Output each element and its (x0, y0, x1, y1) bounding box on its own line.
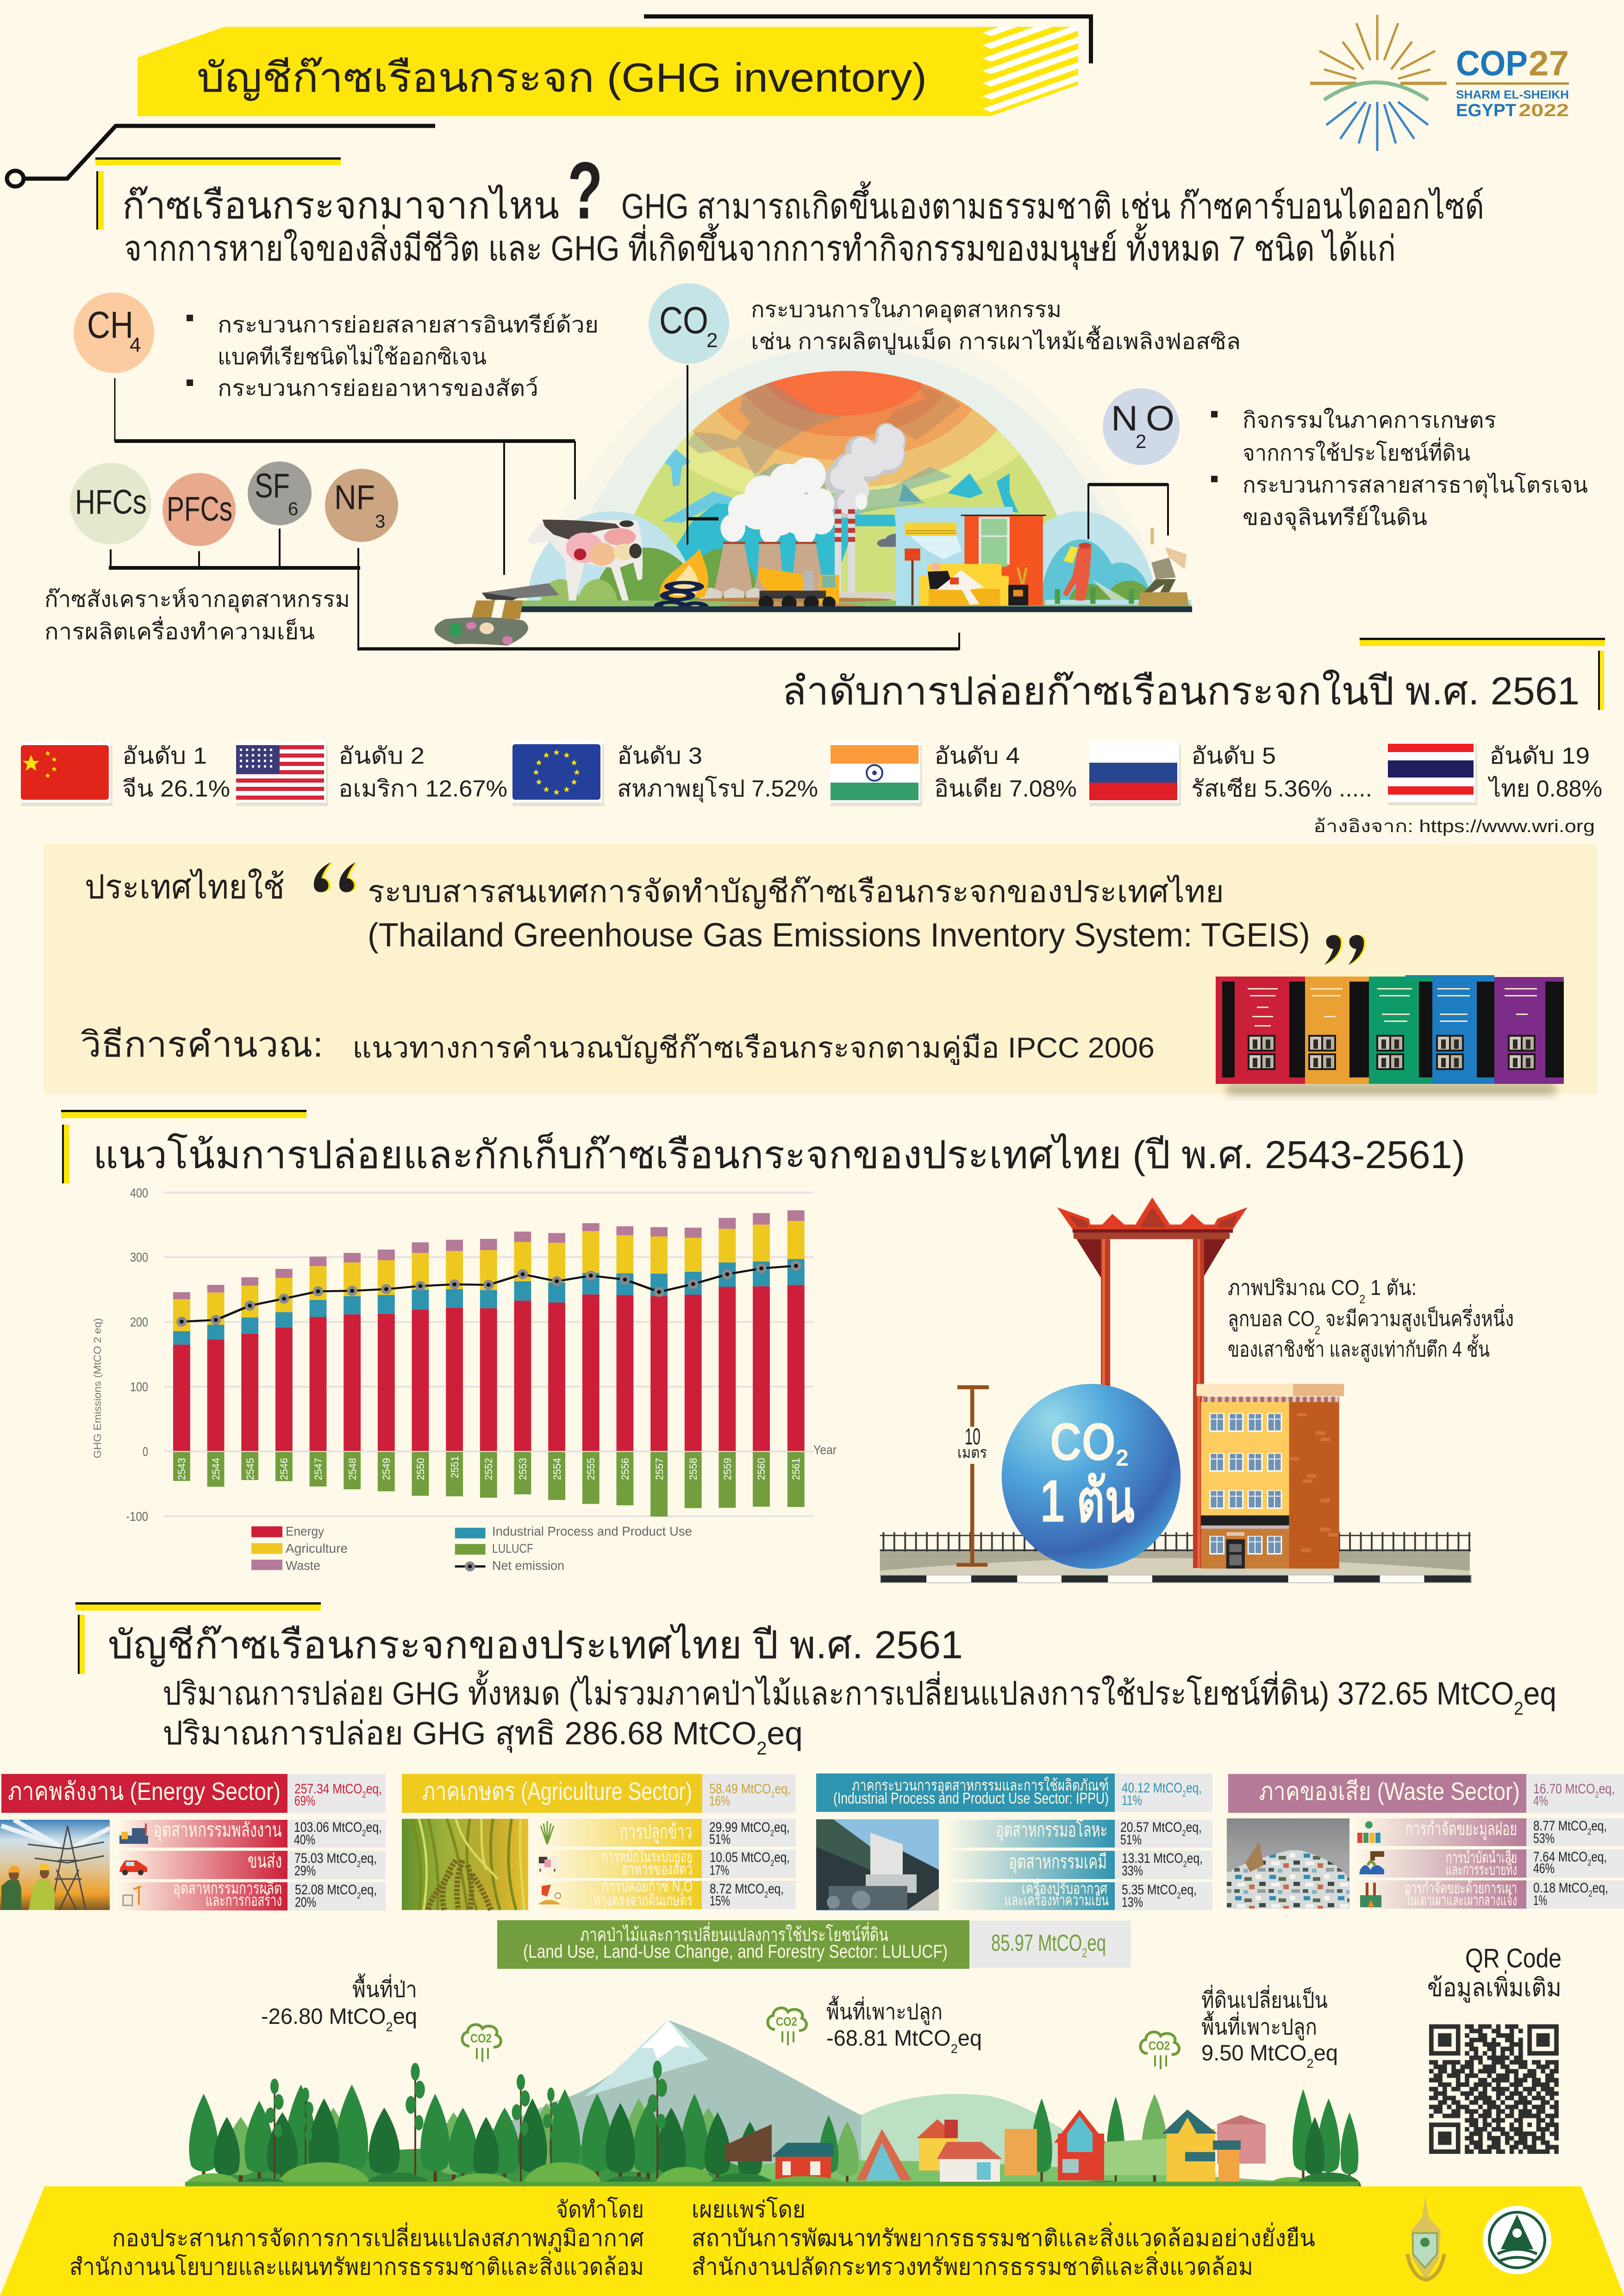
panel: waste sector: ในเตาเผาและเผากลางแจ้ง (1405, 1891, 1517, 1909)
heading: emission trend (61, 1110, 1465, 1183)
gas: N2O: 2 (1136, 430, 1146, 452)
chart: emissions by sector: 2550 (415, 1458, 426, 1480)
heading: Thailand GHG inventory 2018: 2 (756, 1738, 767, 1759)
icon: construction crane (123, 1886, 141, 1905)
gases: HFCs, PFCs, SF6, NF3: HFCs (75, 483, 147, 521)
COP27 logo: 2022 (1518, 101, 1569, 120)
panel: waste sector: การกำจัดขยะมูลฝอย (1405, 1819, 1517, 1840)
panel: energy sector: eq, (366, 1781, 382, 1797)
rank 2 USA: อเมริกา 12.67% (338, 776, 507, 802)
panel: agriculture sector: 2 (764, 1890, 768, 1899)
panel: industrial process sector: 33% (1122, 1863, 1143, 1879)
QR code block: QR Code (1465, 1943, 1562, 1973)
chart: emissions by sector: 2543 (176, 1458, 187, 1480)
panel: agriculture sector: 58.49 MtCO (709, 1781, 784, 1797)
gas: CH4: 4 (130, 334, 141, 356)
panel: industrial process sector: 13.31 MtCO (1122, 1851, 1197, 1866)
chart: emissions by sector: 2560 (756, 1458, 767, 1480)
chart: emissions by sector: 200 (130, 1315, 148, 1329)
panel: agriculture sector: อาหารของสัตว์ (622, 1860, 693, 1878)
illustration: one tonne of CO2: 1 ตัน (1040, 1467, 1135, 1535)
panel: waste sector: 2 (1587, 1858, 1591, 1867)
heading: Thailand GHG inventory 2018: ปริมาณการปล่อย GHG ทั้งหมด (ไม่รวมภาคป่าไม้และการเปลี่ยนแปลงการใช้ประโยชน์ที่ดิน) 372.65 MtCO (162, 1675, 1624, 1711)
panel: LULUCF sector (497, 1920, 1131, 1969)
panel: energy sector: 257.34 MtCO (294, 1781, 377, 1797)
illustration: one tonne of CO2: 1 ตัน: (1365, 1276, 1417, 1300)
chart: emissions by sector: 2557 (654, 1458, 665, 1480)
gas: CO2: เช่น การผลิตปูนเม็ด การเผาไหม้เชื้อเพลิงฟอสซิล (751, 325, 1241, 355)
LULUCF labels with CO2 icons: 2 (951, 2041, 958, 2056)
gas: CH4 (74, 292, 599, 401)
illustration: one tonne of CO2: 10 (965, 1424, 981, 1450)
footer: จัดทำโดย (556, 2196, 644, 2222)
panel: energy sector: อุตสาหกรรมพลังงาน (153, 1819, 282, 1842)
QR code block: ข้อมูลเพิ่มเติม (1427, 1970, 1562, 2003)
chart: emissions by sector: GHG Emissions (MtCO 2 eq) (92, 1318, 103, 1458)
landscape: forest, mountain and village (185, 2020, 1361, 2210)
gas: CH4: กระบวนการย่อยสลายสารอินทรีย์ด้วย (218, 313, 599, 337)
panel: agriculture sector: eq, (774, 1850, 790, 1865)
LULUCF labels with CO2 icons: 2 (386, 2020, 393, 2034)
panel: industrial process sector: 2 (1182, 1789, 1186, 1798)
LULUCF labels with CO2 icons: 9.50 MtCO (1201, 2041, 1309, 2066)
gases: HFCs, PFCs, SF6, NF3: การผลิตเครื่องทำความเย็น (44, 616, 315, 644)
panel: industrial process sector: เครื่องปรับอากาศ (1022, 1878, 1107, 1898)
chart: emissions by sector: 2554 (551, 1458, 563, 1480)
icon: incinerator (1360, 1883, 1381, 1907)
COP27 logo: EGYPT (1456, 101, 1516, 120)
footer: สำนักงานปลัดกระทรวงทรัพยากรธรรมชาติและสิ่งแวดล้อม (692, 2251, 1253, 2280)
IPCC books (1216, 975, 1564, 1095)
rank 4 India (831, 741, 1077, 806)
gases: HFCs, PFCs, SF6, NF3: NF (334, 478, 375, 516)
rank 5 Russia: อันดับ 5 (1191, 743, 1276, 769)
footer (0, 2186, 1624, 2296)
LULUCF labels with CO2 icons: พื้นที่เพาะปลูก (826, 1996, 943, 2025)
rank 3 EU: สหภาพยุโรป 7.52% (617, 776, 818, 803)
panel: agriculture sector: 51% (709, 1832, 731, 1847)
LULUCF labels with CO2 icons: -68.81 MtCO (826, 2026, 954, 2051)
heading: emission trend: แนวโน้มการปล่อยและกักเก็บก๊าซเรือนกระจกของประเทศไทย (ปี พ.ศ. 2543-2561) (93, 1132, 1465, 1176)
gases: HFCs, PFCs, SF6, NF3: 6 (288, 499, 298, 519)
chart: emissions by sector: 2546 (278, 1458, 290, 1480)
panel: waste sector: eq, (1591, 1849, 1607, 1865)
panel: energy sector: 103.06 MtCO (294, 1820, 376, 1835)
panel: energy sector: 69% (294, 1793, 315, 1809)
panel: agriculture sector: eq, (768, 1881, 784, 1897)
LULUCF labels with CO2 icons (261, 1973, 1338, 2071)
illustration: one tonne of CO2: ภาพปริมาณ CO (1228, 1276, 1376, 1300)
photo: rice field (402, 1819, 528, 1910)
panel: industrial process sector: 11% (1122, 1793, 1142, 1808)
panel: agriculture sector: eq, (775, 1781, 791, 1797)
chart: emissions by sector: 2553 (517, 1458, 529, 1480)
panel: industrial process sector: 2 (1177, 1891, 1181, 1900)
panel: LULUCF sector: eq (1087, 1930, 1106, 1956)
chart: emissions by sector: 2545 (244, 1458, 256, 1480)
panel: industrial process sector: 2 (1182, 1829, 1186, 1838)
illustration: one tonne of CO2: CO (1050, 1412, 1116, 1472)
rank 5 Russia: รัสเซีย 5.36% ..... (1191, 776, 1372, 802)
gas: N2O: จากการใช้ประโยชน์ที่ดิน (1243, 437, 1470, 466)
gases: HFCs, PFCs, SF6, NF3: ก๊าซสังเคราะห์จากอุตสาหกรรม (44, 587, 350, 613)
chart: emissions by sector: 400 (130, 1186, 148, 1200)
panel: agriculture sector: 2 (770, 1859, 774, 1868)
gas: N2O (1103, 388, 1588, 531)
LULUCF labels with CO2 icons: ที่ดินเปลี่ยนเป็น (1201, 1985, 1328, 2013)
QR code block (1427, 1943, 1562, 2152)
heading: Thailand GHG inventory 2018: บัญชีก๊าซเรือนกระจกของประเทศไทย ปี พ.ศ. 2561 (108, 1623, 963, 1668)
panel: LULUCF sector: (Land Use, Land-Use Change, and Forestry Sector: LULUCF) (523, 1941, 948, 1962)
close quote (1324, 935, 1366, 965)
panel: waste sector: 4% (1533, 1793, 1548, 1809)
heading: Thailand GHG inventory 2018: ปริมาณการปล่อย GHG สุทธิ 286.68 MtCO (162, 1715, 759, 1751)
panel: agriculture sector: 15% (710, 1893, 730, 1909)
illustration: one tonne of CO2: ลูกบอล CO (1228, 1307, 1331, 1331)
panel: agriculture sector: 2 (770, 1829, 774, 1838)
panel: industrial process sector: (Industrial Process and Product Use Sector: IPPU) (833, 1790, 1109, 1807)
gas: CO2: CO (659, 299, 708, 342)
panel: agriculture sector: ทางตรงจากดินเกษตร (593, 1892, 693, 1909)
icon: soil and hand (538, 1885, 561, 1904)
panel: TGEIS and calculation method: แนวทางการคำนวณบัญชีก๊าซเรือนกระจกตามคู่มือ IPCC 2006 (352, 1032, 1155, 1065)
panel: agriculture sector: 16% (709, 1793, 730, 1809)
footer: สถาบันการพัฒนาทรัพยากรธรรมชาติและสิ่งแวดล้อมอย่างยั่งยืน (692, 2222, 1315, 2251)
smoke plumes (824, 423, 906, 518)
tyres (658, 583, 704, 610)
chart: emissions by sector: 2551 (449, 1456, 461, 1478)
chart: emissions by sector: 2547 (312, 1458, 324, 1480)
gas: CH4: CH (87, 304, 133, 346)
icon: power plant (119, 1823, 148, 1844)
chart: emissions by sector (92, 1186, 837, 1573)
country ranking (21, 740, 1602, 806)
panel: LULUCF sector: 2 (1082, 1946, 1087, 1960)
panel: waste sector: eq, (1593, 1880, 1608, 1896)
living room (896, 507, 1046, 605)
panel: industrial process sector: 2 (1183, 1860, 1187, 1869)
panel: TGEIS and calculation method: วิธีการคำนวณ: (81, 1025, 323, 1064)
panel: energy sector: 75.03 MtCO (294, 1851, 369, 1866)
gas: CO2: 2 (706, 329, 718, 352)
cooling towers and stacks (713, 543, 824, 596)
LULUCF labels with CO2 icons: พื้นที่ป่า (352, 1973, 417, 2002)
gases: HFCs, PFCs, SF6, NF3 (44, 461, 398, 644)
icon: CO2 cloud: CO2 (1149, 2039, 1170, 2053)
panel: industrial process sector: eq, (1186, 1820, 1202, 1835)
title banner: บัญชีก๊าซเรือนกระจก (GHG inventory) (197, 55, 927, 101)
panel: waste sector: 7.64 MtCO (1533, 1849, 1600, 1865)
footer: สำนักงานนโยบายและแผนทรัพยากรธรรมชาติและสิ่งแวดล้อม (69, 2251, 644, 2280)
chart: emissions by sector: 2559 (722, 1458, 733, 1480)
panel: industrial process sector: eq, (1181, 1882, 1197, 1898)
icon: rice plant (541, 1821, 554, 1844)
icon: CO2 cloud (462, 2025, 501, 2062)
heading: emissions ranking (782, 638, 1605, 713)
title banner (137, 14, 1093, 116)
heading: where greenhouse gases come from (7, 126, 1484, 270)
panel: energy sector: eq, (366, 1820, 382, 1835)
panel: LULUCF sector: 85.97 MtCO (991, 1930, 1116, 1956)
panel: energy sector: eq, (361, 1851, 377, 1866)
open quote (314, 862, 358, 892)
cow (527, 520, 643, 601)
panel: industrial process sector: 13% (1122, 1895, 1143, 1910)
LULUCF labels with CO2 icons: 2 (1306, 2056, 1314, 2071)
rank 4 India: อินเดีย 7.08% (934, 776, 1077, 802)
panel: waste sector: การกำจัดขยะด้วยการเผา (1405, 1879, 1517, 1897)
panel: agriculture sector (402, 1774, 796, 1910)
heading: where greenhouse gases come from: ? (568, 146, 603, 236)
panel: energy sector: อุตสาหกรรมการผลิต (173, 1879, 282, 1898)
panel: TGEIS and calculation method: ระบบสารสนเทศการจัดทำบัญชีก๊าซเรือนกระจกของประเทศไทย (368, 874, 1224, 909)
panel: industrial process sector: 5.35 MtCO (1122, 1882, 1189, 1898)
rank 19 Thailand (1388, 740, 1602, 805)
chart: emissions by sector: Year (813, 1443, 837, 1457)
panel: industrial process sector: 40.12 MtCO (1122, 1780, 1197, 1796)
illustration: dome with sources of emissions (435, 234, 1192, 700)
chart: emissions by sector: 2556 (619, 1458, 631, 1480)
gas: CO2: กระบวนการในภาคอุตสาหกรรม (751, 297, 1062, 323)
panel: energy sector: 2 (362, 1829, 366, 1838)
gas: N2O: กระบวนการสลายสารธาตุไนโตรเจน (1243, 472, 1588, 498)
photo: factory (816, 1819, 939, 1910)
panel: energy sector (0, 1774, 386, 1910)
sprayer (1057, 543, 1131, 604)
panel: energy sector: ภาคพลังงาน (Energy Sector) (8, 1778, 281, 1805)
rank 5 Russia (1089, 741, 1372, 806)
panel: industrial process sector (816, 1773, 1212, 1910)
COP27 logo (1310, 15, 1569, 151)
footer: กองประสานการจัดการการเปลี่ยนแปลงสภาพภูมิอากาศ (112, 2222, 644, 2252)
panel: TGEIS and calculation method: (Thailand Greenhouse Gas Emissions Inventory System: TGEIS) (368, 917, 1310, 954)
illustration: one tonne of CO2: เมตร (957, 1444, 987, 1462)
panel: waste sector: 2 (1595, 1790, 1599, 1799)
heading: where greenhouse gases come from: จากการหายใจของสิ่งมีชีวิต และ GHG ที่เกิดขึ้นจากการทำกิจกรรมของมนุษย์ ทั้งหมด 7 ชนิด ได้แก่ (124, 223, 1396, 270)
illustration: one tonne of CO2: จะมีความสูงเป็นครึ่งหนึ่ง (1320, 1304, 1514, 1332)
panel: energy sector: 2 (357, 1891, 361, 1900)
flame (659, 548, 708, 599)
panel: waste sector: 0.18 MtCO (1533, 1880, 1600, 1896)
panel: energy sector: eq, (361, 1882, 377, 1898)
heading: emissions ranking: ลำดับการปล่อยก๊าซเรือนกระจกในปี พ.ศ. 2561 (782, 669, 1580, 713)
gas: N2O: กิจกรรมในภาคการเกษตร (1243, 407, 1496, 433)
illustration: one tonne of CO2 (880, 1197, 1514, 1583)
chart: emissions by sector: 2561 (790, 1458, 802, 1480)
panel: agriculture sector: 8.72 MtCO (710, 1881, 777, 1897)
photo: rubbish pile (1227, 1818, 1349, 1909)
panel: industrial process sector: อุตสาหกรรมเคมี (1009, 1851, 1107, 1874)
panel: energy sector: และการก่อสร้าง (206, 1891, 282, 1910)
rank 1 China: จีน 26.1% (122, 776, 230, 802)
panel: agriculture sector: O (684, 1878, 693, 1895)
panel: waste sector: 46% (1533, 1861, 1555, 1876)
heading: Thailand GHG inventory 2018 (75, 1602, 1556, 1759)
panel: industrial process sector: อุตสาหกรรมอโลหะ (996, 1818, 1107, 1842)
panel: LULUCF sector: ภาคป่าไม้และการเปลี่ยนแปลงการใช้ประโยชน์ที่ดิน (580, 1922, 888, 1945)
panel: agriculture sector: การปล่อยก๊าซ N (602, 1878, 712, 1895)
icon: CO2 cloud (1140, 2032, 1179, 2069)
panel: waste sector: 2 (1587, 1827, 1591, 1836)
panel: agriculture sector: การหมักในระบบย่อย (602, 1848, 693, 1866)
logo: round seal (1483, 2206, 1551, 2274)
panel: waste sector (1227, 1774, 1624, 1909)
illustration: one tonne of CO2: 2 (1359, 1292, 1365, 1306)
icon: cow (538, 1857, 557, 1872)
panel: agriculture sector: การปลูกข้าว (620, 1821, 692, 1843)
chart: emissions by sector: 300 (130, 1250, 148, 1264)
COP27 logo: COP (1456, 44, 1528, 83)
gas: N2O: O (1146, 399, 1174, 438)
chart: emissions by sector: 100 (130, 1380, 148, 1394)
footer: เผยแพร่โดย (692, 2196, 806, 2222)
connector lines (109, 365, 1168, 650)
panel: industrial process sector: 20.57 MtCO (1120, 1820, 1195, 1835)
chart: emissions by sector: 2544 (210, 1458, 222, 1480)
chart: emissions by sector: Agriculture (286, 1541, 348, 1556)
icon: recycling bins (1357, 1821, 1380, 1843)
rank 3 EU (512, 740, 818, 806)
heading: where greenhouse gases come from: ก๊าซเรือนกระจกมาจากไหน (122, 185, 559, 227)
photo: power pylon and workers (0, 1820, 110, 1910)
icon: CO2 cloud: CO2 (470, 2031, 492, 2045)
rank 4 India: อันดับ 4 (934, 743, 1020, 769)
LULUCF labels with CO2 icons: eq (1314, 2041, 1338, 2066)
panel: agriculture sector: 10.05 MtCO (710, 1850, 785, 1865)
panel: waste sector: 53% (1533, 1831, 1555, 1846)
gas: N2O: N (1111, 399, 1138, 438)
gas: CO2 (649, 283, 1241, 364)
panel: industrial process sector: ภาคกระบวนการอุตสาหกรรมและการใช้ผลิตภัณฑ์ (852, 1776, 1109, 1795)
panel: waste sector: และการระบายทิ้ง (1446, 1858, 1517, 1879)
LULUCF labels with CO2 icons: -26.80 MtCO (261, 2004, 388, 2029)
icon: CO2 cloud (768, 2008, 806, 2045)
source note: อ้างอิงจาก: https://www.wri.org (1313, 817, 1595, 836)
illustration: one tonne of CO2: 2 (1116, 1445, 1129, 1471)
rank 2 USA (236, 741, 507, 806)
chart: emissions by sector: 2558 (687, 1458, 699, 1480)
panel: energy sector: 52.08 MtCO (295, 1882, 370, 1898)
panel: agriculture sector: 2 (680, 1887, 684, 1898)
panel: agriculture sector: 29.99 MtCO (709, 1820, 784, 1835)
panel: waste sector: 1% (1533, 1893, 1547, 1908)
panel: agriculture sector: ภาคเกษตร (Agriculture Sector) (422, 1778, 692, 1805)
rank 1 China (21, 741, 230, 806)
panel: energy sector: 2 (357, 1860, 361, 1869)
panel: agriculture sector: eq, (774, 1820, 790, 1835)
panel: waste sector: การบำบัดน้ำเสีย (1446, 1846, 1517, 1867)
mixer truck (693, 567, 892, 612)
gas: N2O: ของจุลินทรีย์ในดิน (1243, 504, 1427, 531)
heading: Thailand GHG inventory 2018: eq (1524, 1675, 1556, 1711)
chart: emissions by sector: 2549 (381, 1458, 392, 1480)
panel: waste sector: 8.77 MtCO (1533, 1818, 1600, 1834)
panel: energy sector: 2 (362, 1790, 366, 1799)
chart: emissions by sector: Energy (286, 1524, 324, 1538)
icon: car (119, 1860, 147, 1875)
chart: emissions by sector: Waste (286, 1558, 320, 1573)
icon: CO2 cloud: CO2 (776, 2015, 797, 2028)
panel: energy sector: 29% (294, 1863, 316, 1879)
chart: emissions by sector: Industrial Process and Product Use (492, 1524, 692, 1538)
heading: where greenhouse gases come from: GHG สามารถเกิดขึ้นเองตามธรรมชาติ เช่น ก๊าซคาร์บอนไดออกไซด์ (621, 181, 1484, 226)
panel: TGEIS and calculation method: ประเทศไทยใช้ (85, 868, 285, 906)
illustration: one tonne of CO2: 2 (1315, 1323, 1320, 1337)
COP27 logo: SHARM EL-SHEIKH (1456, 88, 1569, 101)
gas: CH4: แบคทีเรียชนิดไม่ใช้ออกซิเจน (218, 344, 487, 369)
chart: emissions by sector: Net emission (492, 1558, 564, 1573)
LULUCF labels with CO2 icons: eq (958, 2026, 982, 2051)
gas: CH4: กระบวนการย่อยอาหารของสัตว์ (218, 376, 538, 401)
leaking pipes and polluted puddle (435, 583, 559, 646)
chart: emissions by sector: -100 (126, 1509, 148, 1524)
panel: waste sector: ภาคของเสีย (Waste Sector) (1259, 1778, 1520, 1805)
panel: waste sector: eq, (1591, 1818, 1607, 1834)
rank 19 Thailand: ไทย 0.88% (1487, 776, 1602, 802)
chart: emissions by sector: LULUCF (492, 1541, 533, 1556)
panel: waste sector: eq, (1599, 1781, 1615, 1797)
panel: waste sector: 2 (1588, 1889, 1593, 1898)
chart: emissions by sector: 2548 (347, 1458, 358, 1480)
panel: agriculture sector: 17% (710, 1863, 729, 1878)
gases: HFCs, PFCs, SF6, NF3: PFCs (167, 490, 232, 528)
rank 1 China: อันดับ 1 (122, 743, 207, 769)
LULUCF labels with CO2 icons: eq (393, 2004, 417, 2029)
farmer (1138, 528, 1189, 605)
rank 3 EU: อันดับ 3 (617, 743, 702, 769)
chart: emissions by sector: 0 (143, 1444, 148, 1459)
illustration: one tonne of CO2: ของเสาชิงช้า และสูงเท่ากับตึก 4 ชั้น (1228, 1334, 1490, 1362)
rank 19 Thailand: อันดับ 19 (1489, 743, 1590, 769)
panel: TGEIS and calculation method (44, 844, 1597, 1095)
panel: energy sector: ขนส่ง (248, 1850, 282, 1872)
rank 2 USA: อันดับ 2 (338, 743, 425, 769)
chart: emissions by sector: 2555 (585, 1458, 597, 1480)
panel: energy sector: 40% (294, 1832, 315, 1848)
heading: Thailand GHG inventory 2018: 2 (1514, 1699, 1524, 1719)
panel: energy sector: 20% (295, 1895, 316, 1910)
gases: HFCs, PFCs, SF6, NF3: SF (255, 467, 290, 505)
heading: Thailand GHG inventory 2018: eq (767, 1715, 803, 1751)
panel: agriculture sector: 2 (771, 1790, 775, 1799)
COP27 logo: 27 (1529, 44, 1569, 83)
LULUCF labels with CO2 icons: พื้นที่เพาะปลูก (1201, 2011, 1317, 2041)
panel: waste sector: 16.70 MtCO (1533, 1781, 1608, 1797)
gases: HFCs, PFCs, SF6, NF3: 3 (375, 511, 385, 532)
chart: emissions by sector: 2552 (483, 1458, 494, 1480)
village houses (725, 2109, 1266, 2183)
logo: provincial emblem (1407, 2196, 1444, 2280)
panel: industrial process sector: eq, (1186, 1780, 1202, 1796)
icon: wastewater (1359, 1851, 1384, 1874)
panel: industrial process sector: eq, (1187, 1851, 1203, 1866)
panel: industrial process sector: 51% (1120, 1832, 1142, 1848)
panel: industrial process sector: และเครื่องทำความเย็น (1005, 1889, 1109, 1909)
